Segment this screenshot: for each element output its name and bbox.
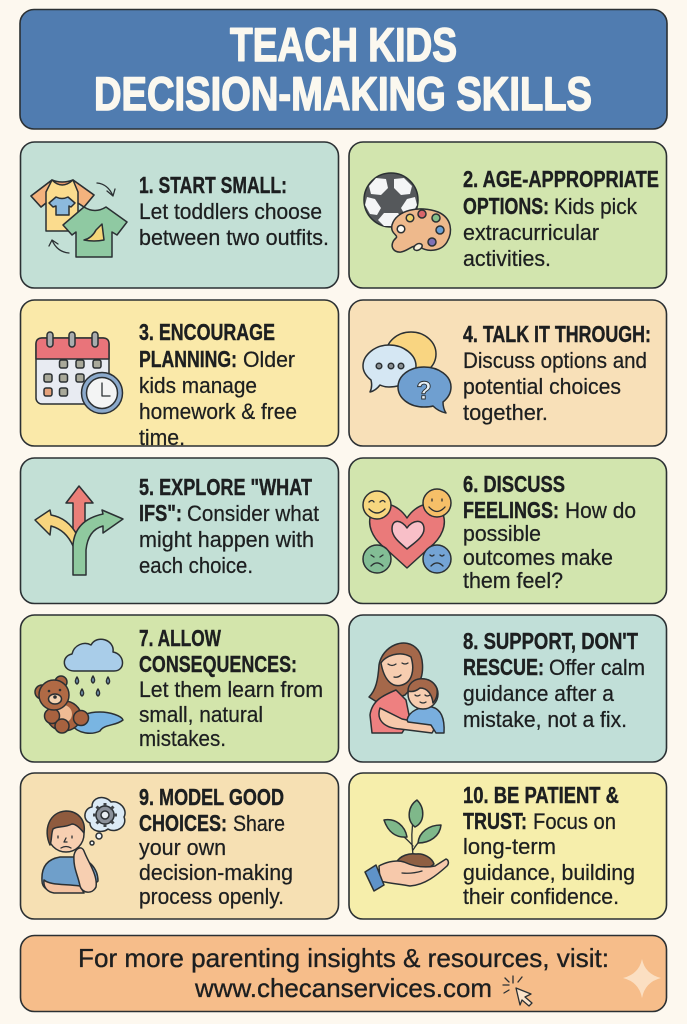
text block (139, 319, 297, 450)
footer text: For more parenting insights & resources, visit: (78, 943, 609, 973)
text block (139, 784, 293, 909)
icon: cursor click (503, 976, 532, 1006)
text block: time. (139, 425, 185, 450)
text block (139, 625, 323, 751)
panel: 2 age-appropriate options (349, 142, 666, 288)
panel: 5 explore what ifs (20, 458, 338, 604)
text block: 10. BE PATIENT & (463, 782, 619, 808)
text block: Share (233, 811, 285, 836)
text block: 6. DISCUSS (463, 471, 565, 497)
text block: Offer calm (549, 655, 645, 680)
text block: 1. START SMALL: (139, 172, 287, 198)
text block: decision-making (139, 860, 293, 885)
text block: guidance after a (463, 681, 615, 706)
icon: speech bubbles: ? (416, 377, 432, 405)
panel: 8 support, don't rescue (349, 615, 666, 762)
text block: potential choices (463, 374, 621, 399)
icon: three-way arrows (35, 486, 123, 575)
icon: speech bubbles (363, 332, 451, 413)
text block: their confidence. (463, 884, 619, 909)
title banner (20, 10, 667, 129)
text block: process openly. (139, 884, 284, 909)
text block (463, 628, 645, 732)
text block: mistake, not a fix. (463, 707, 627, 732)
icon: parent hugging child (369, 643, 444, 733)
text block: 3. ENCOURAGE (139, 319, 275, 345)
panel: 9 model good choices (20, 773, 338, 919)
text block (463, 782, 635, 909)
text block: RESCUE: (463, 654, 544, 680)
icon: heart and faces (363, 489, 451, 573)
text block: 7. ALLOW (139, 625, 221, 651)
icon: calendar and clock (36, 332, 122, 414)
text block: Let toddlers choose (139, 199, 322, 224)
text block: OPTIONS: (463, 193, 549, 219)
icon: sparkle (623, 959, 661, 998)
text block: each choice. (139, 553, 253, 578)
text block: Discuss options and (463, 348, 647, 373)
footer panel (20, 936, 666, 1012)
text block: outcomes make (463, 545, 613, 570)
text block (463, 321, 651, 425)
text block (463, 166, 659, 271)
footer text (78, 943, 609, 1003)
text block: kids manage (139, 373, 257, 398)
text block: Consider what (187, 501, 319, 526)
title banner: TEACH KIDS (230, 18, 457, 71)
icon: cloud, rain and teddy bear (35, 639, 123, 733)
footer text: www.checanservices.com (194, 973, 492, 1003)
text block: guidance, building (463, 860, 635, 885)
text block: between two outfits. (139, 225, 329, 250)
text block: Focus on (533, 809, 616, 834)
text block: them feel? (463, 568, 563, 593)
text block: Let them learn from (139, 677, 323, 702)
text block: homework & free (139, 399, 297, 424)
text block: PLANNING: (139, 346, 237, 372)
text block: mistakes. (139, 726, 226, 751)
text block: 5. EXPLORE "WHAT (139, 474, 312, 500)
text block: FEELINGS: (463, 497, 559, 523)
text block: How do (565, 498, 636, 523)
text block: Kids pick (554, 194, 638, 219)
text block (463, 471, 636, 593)
icon: soccer ball and palette (364, 173, 450, 252)
panel: 4 talk it through (349, 300, 666, 446)
panel: 10 be patient and trust (349, 773, 666, 919)
text block: extracurricular (463, 220, 599, 245)
text block: might happen with (139, 527, 314, 552)
icon: two shirts (31, 180, 127, 257)
text block (139, 172, 329, 250)
text block: CHOICES: (139, 810, 227, 836)
text block: together. (463, 400, 548, 425)
panel: 1 start small (20, 142, 338, 288)
text block: activities. (463, 246, 551, 271)
text block: small, natural (139, 702, 263, 727)
text block: long-term (463, 834, 556, 859)
text block: Older (243, 347, 295, 372)
panel: 6 discuss feelings (349, 458, 666, 604)
text block: your own (139, 835, 226, 860)
text block: CONSEQUENCES: (139, 651, 297, 677)
text block (139, 474, 319, 578)
panel: 3 encourage planning (20, 300, 338, 450)
text block: TRUST: (463, 808, 527, 834)
text block: 8. SUPPORT, DON'T (463, 628, 638, 654)
text block: IFS": (139, 500, 182, 526)
icon: seedling in hand (365, 800, 448, 891)
text block: 9. MODEL GOOD (139, 784, 284, 810)
panel: 7 allow consequences (20, 615, 338, 762)
text block: possible (463, 521, 541, 546)
icon: thinking person (42, 798, 125, 893)
